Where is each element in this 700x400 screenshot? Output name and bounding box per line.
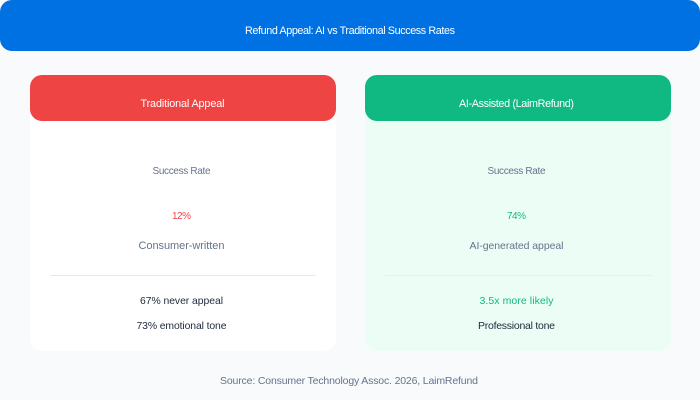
title banner [0, 0, 700, 51]
panel: traditional appeal [30, 75, 336, 351]
label: success rate: Success Rate [488, 166, 546, 177]
fact: 67% never appeal: 67% never appeal [140, 296, 223, 307]
title: Refund Appeal: AI vs Traditional Success Rates [245, 25, 456, 37]
source note: Source: Consumer Technology Assoc. 2026, LaimRefund [220, 375, 478, 387]
label: success rate: Success Rate [152, 166, 211, 177]
panel header: traditional appeal: Traditional Appeal [140, 98, 224, 110]
stat: 12%: 12% [172, 211, 191, 222]
caption: AI-generated appeal: AI-generated appeal [470, 240, 564, 252]
fact: 73% emotional tone: 73% emotional tone [136, 321, 227, 332]
panel header: AI-assisted: AI-Assisted (LaimRefund) [459, 98, 574, 110]
panel: AI-assisted [365, 75, 671, 351]
fact: professional tone: Professional tone [478, 320, 555, 332]
fact: 3.5x more likely: 3.5x more likely [480, 295, 554, 307]
stat: 74%: 74% [507, 211, 526, 222]
panel header: traditional appeal [30, 75, 336, 121]
caption: consumer-written: Consumer-written [138, 240, 224, 252]
panel header: AI-assisted [365, 75, 671, 121]
